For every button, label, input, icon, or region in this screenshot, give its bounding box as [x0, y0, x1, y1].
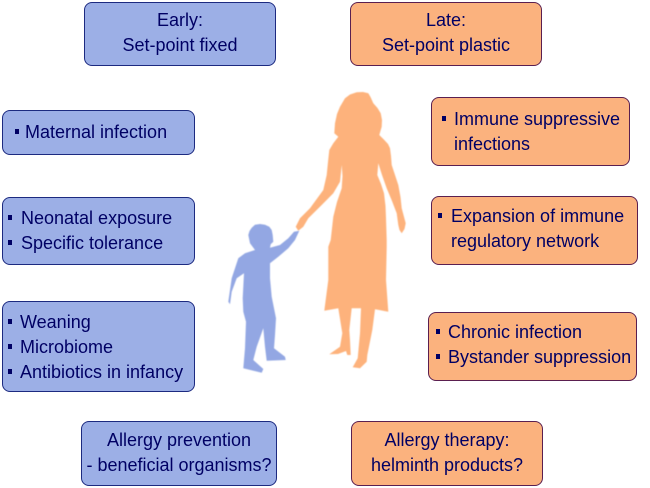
- panel: neonatal exposure: Specific tolerance: [21, 233, 163, 253]
- panel: weaning, microbiome, antibiotics: [2, 301, 195, 392]
- panel: late heading: Set-point plastic: [382, 35, 510, 55]
- panel: maternal infection: [2, 110, 195, 155]
- panel: allergy prevention: Allergy prevention: [107, 430, 251, 450]
- panel: immune suppressive infections: Immune suppressive: [454, 109, 620, 129]
- silhouette: child: [228, 224, 299, 373]
- panel: allergy prevention: - beneficial organisms?: [86, 455, 272, 475]
- panel: early heading: [84, 2, 276, 66]
- panel: maternal infection: Maternal infection: [25, 122, 167, 142]
- panel: allergy therapy: [351, 421, 543, 486]
- panel: expansion of immune regulatory network: [431, 196, 638, 265]
- panel: weaning, microbiome, antibiotics: Microbiome: [20, 337, 113, 357]
- panel: chronic infection, bystander suppression: [428, 312, 637, 381]
- panel: immune suppressive infections: [431, 97, 630, 166]
- panel: weaning, microbiome, antibiotics: Antibiotics in infancy: [20, 362, 183, 382]
- panel: immune suppressive infections: infections: [454, 134, 530, 154]
- panel: allergy therapy: helminth products?: [371, 455, 523, 475]
- panel: weaning, microbiome, antibiotics: Weaning: [20, 312, 91, 332]
- panel: chronic infection, bystander suppression: Chronic infection: [448, 322, 582, 342]
- panel: allergy therapy: Allergy therapy:: [384, 430, 510, 450]
- panel: early heading: Early:: [157, 10, 203, 30]
- panel: late heading: Late:: [426, 10, 466, 30]
- panel: expansion of immune regulatory network: Expansion of immune: [451, 206, 624, 226]
- panel: early heading: Set-point fixed: [122, 35, 238, 55]
- panel: allergy prevention: [81, 421, 277, 486]
- panel: expansion of immune regulatory network: regulatory network: [451, 231, 599, 251]
- silhouette: woman: [296, 92, 406, 368]
- panel: late heading: [350, 2, 542, 66]
- panel: chronic infection, bystander suppression: Bystander suppression: [448, 347, 631, 367]
- panel: neonatal exposure: [2, 197, 195, 265]
- panel: neonatal exposure: Neonatal exposure: [21, 208, 172, 228]
